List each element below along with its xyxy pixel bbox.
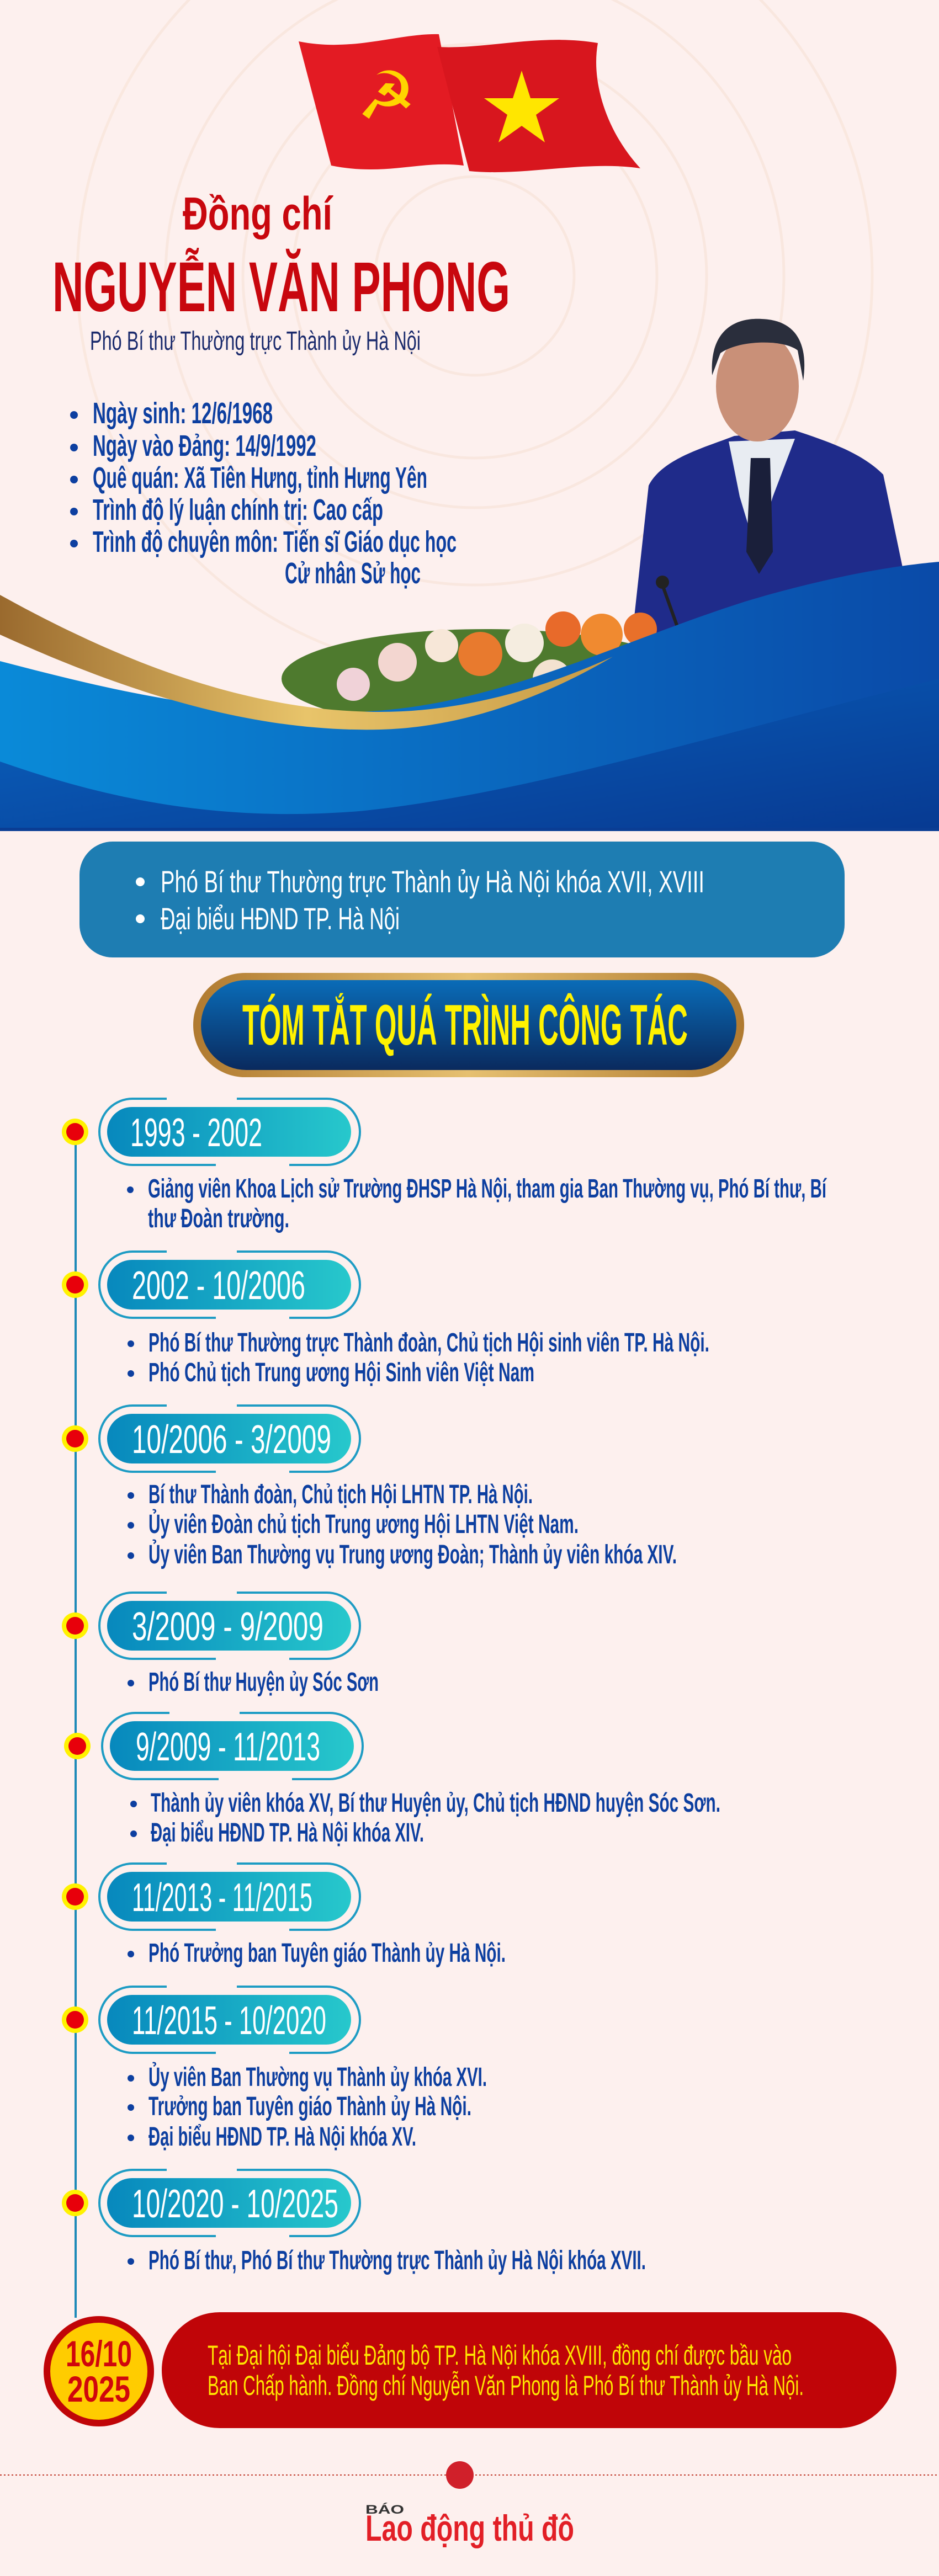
- timeline item 3: Bí thư Thành đoàn, Chủ tịch Hội LHTN TP. Hà Nội.: [148, 1480, 533, 1509]
- timeline item 7: Trưởng ban Tuyên giáo Thành ủy Hà Nội.: [148, 2092, 471, 2121]
- title: Đồng chí: Đồng chí: [183, 188, 333, 239]
- icon: star: [484, 71, 559, 142]
- footer divider: [0, 2474, 939, 2476]
- personal info list: Trình độ lý luận chính trị: Cao cấp: [93, 493, 383, 526]
- callout: final milestone: 16/10: [66, 2333, 132, 2374]
- logo: BÁO: [365, 2503, 404, 2516]
- heading: section title: [193, 973, 744, 1077]
- personal info list: Ngày sinh: 12/6/1968: [93, 397, 273, 430]
- timeline item 7: Ủy viên Ban Thường vụ Thành ủy khóa XVI.: [148, 2062, 487, 2092]
- timeline item 4: [62, 1589, 379, 1697]
- wave: blue: [0, 562, 939, 831]
- flag: [299, 34, 640, 172]
- timeline item 8: Phó Bí thư, Phó Bí thư Thường trực Thành ủy Hà Nội khóa XVII.: [148, 2246, 646, 2275]
- icon: red circle: [446, 2461, 474, 2489]
- subtitle: Phó Bí thư Thường trực Thành ủy Hà Nội: [90, 327, 421, 356]
- timeline item 2: [62, 1248, 709, 1387]
- timeline item 7: [62, 1983, 487, 2152]
- callout: final milestone: 2025: [67, 2369, 130, 2409]
- timeline item 5: 9/2009 - 11/2013: [136, 1725, 320, 1769]
- logo: Lao động thủ đô: [365, 2508, 574, 2548]
- callout: final milestone: [44, 2312, 896, 2428]
- logo: [365, 2503, 574, 2548]
- personal info list: Quê quán: Xã Tiên Hưng, tỉnh Hưng Yên: [93, 461, 427, 494]
- timeline item 6: [62, 1860, 506, 1968]
- timeline item 2: 2002 - 10/2006: [132, 1264, 305, 1308]
- timeline item 8: 10/2020 - 10/2025: [132, 2182, 338, 2226]
- personal info list: Cử nhân Sử học: [285, 557, 421, 590]
- timeline line: [75, 1132, 77, 2318]
- icon: hammer and sickle: ☭: [357, 59, 416, 133]
- personal info list: Trình độ chuyên môn: Tiến sĩ Giáo dục học: [93, 525, 457, 558]
- timeline item 4: Phó Bí thư Huyện ủy Sóc Sơn: [148, 1668, 379, 1697]
- gold swoosh: [0, 595, 613, 730]
- timeline item 1: [62, 1095, 827, 1233]
- panel: current positions: [79, 842, 845, 957]
- timeline item 3: [62, 1402, 677, 1569]
- timeline item 3: 10/2006 - 3/2009: [132, 1418, 331, 1462]
- timeline item 6: 11/2013 - 11/2015: [132, 1876, 312, 1920]
- timeline item 3: Ủy viên Đoàn chủ tịch Trung ương Hội LHTN Việt Nam.: [148, 1509, 579, 1539]
- background drum pattern: [77, 0, 872, 673]
- photo: speaker: [629, 319, 911, 662]
- timeline item 5: [64, 1710, 720, 1848]
- panel: current positions: Phó Bí thư Thường trực Thành ủy Hà Nội khóa XVII, XVIII: [161, 864, 704, 899]
- timeline item 1: thư Đoàn trường.: [148, 1204, 289, 1233]
- timeline item 4: 3/2009 - 9/2009: [132, 1605, 323, 1649]
- timeline item 7: 11/2015 - 10/2020: [132, 1999, 326, 2043]
- personal info list: Ngày vào Đảng: 14/9/1992: [93, 429, 316, 462]
- timeline item 7: Đại biểu HĐND TP. Hà Nội khóa XV.: [148, 2122, 416, 2152]
- panel: current positions: Đại biểu HĐND TP. Hà Nội: [161, 901, 400, 936]
- timeline item 1: 1993 - 2002: [130, 1111, 262, 1155]
- timeline item 6: Phó Trưởng ban Tuyên giáo Thành ủy Hà Nội.: [148, 1939, 506, 1968]
- flowers: [282, 611, 690, 728]
- timeline item 2: Phó Chủ tịch Trung ương Hội Sinh viên Việt Nam: [148, 1358, 534, 1387]
- title: name: NGUYỄN VĂN PHONG: [52, 248, 510, 327]
- timeline item 8: [62, 2167, 646, 2275]
- personal info list: [70, 397, 457, 590]
- timeline item 5: Đại biểu HĐND TP. Hà Nội khóa XIV.: [151, 1818, 424, 1848]
